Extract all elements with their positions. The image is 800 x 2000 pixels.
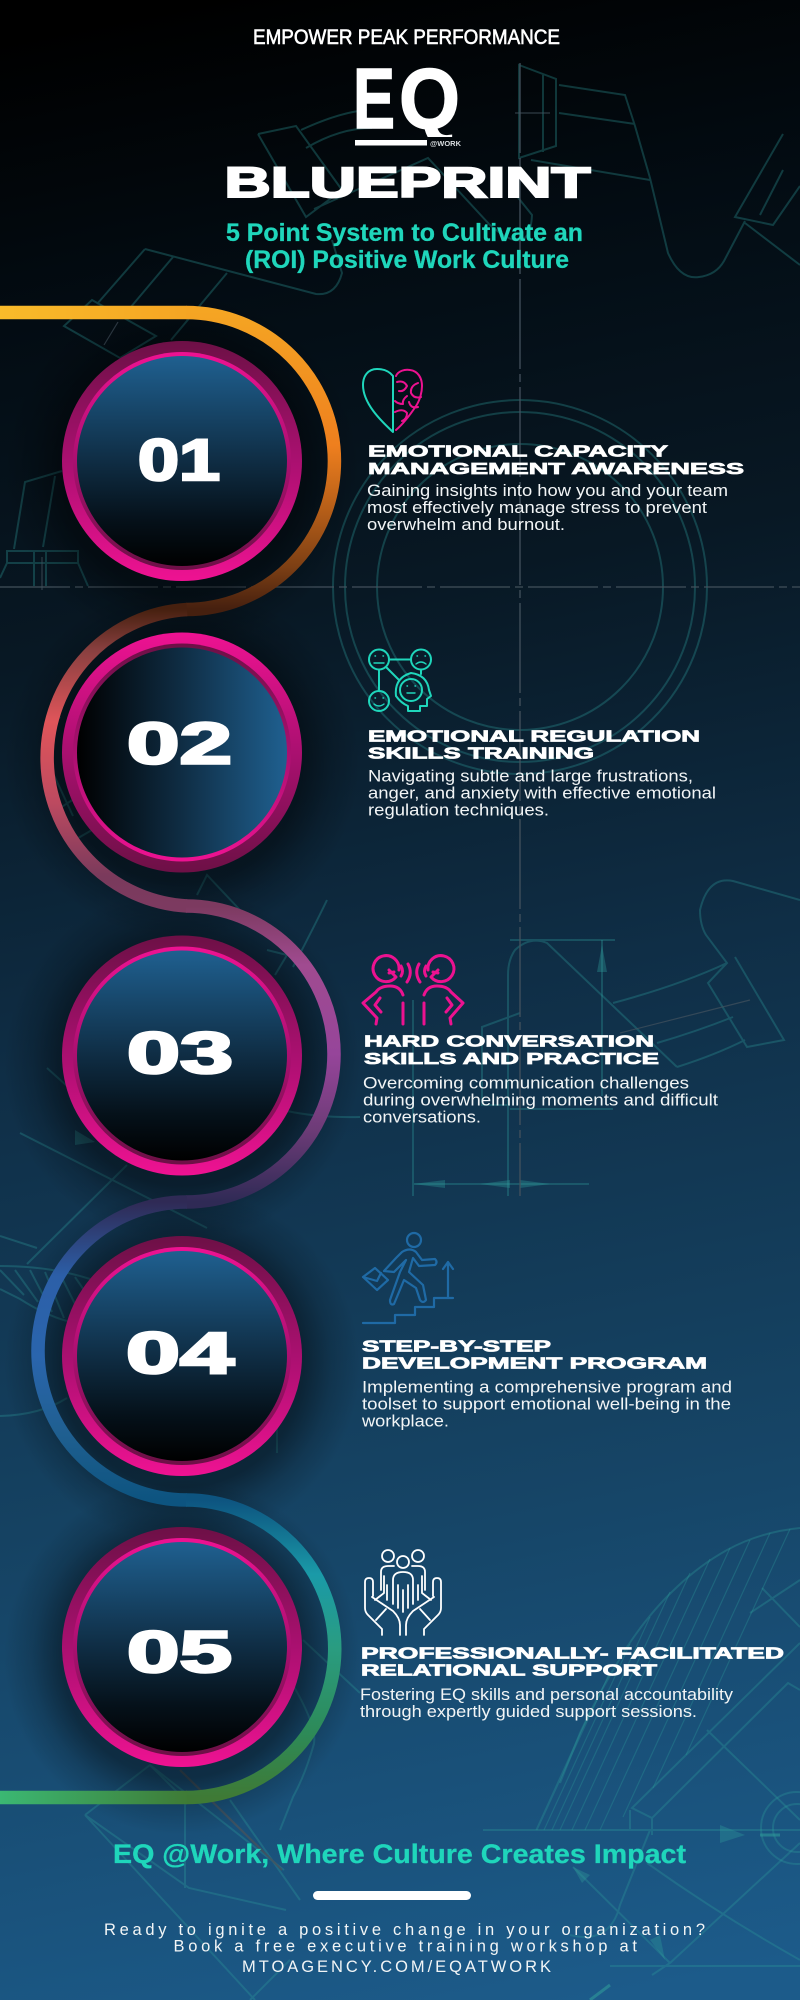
step 05 badge bbox=[62, 1527, 302, 1767]
description bbox=[360, 1685, 734, 1721]
icon: person climbing stairs bbox=[363, 1233, 453, 1323]
heading: STEP-BY-STEP bbox=[362, 1339, 552, 1356]
description: during overwhelming moments and difficult bbox=[363, 1090, 718, 1109]
description: Gaining insights into how you and your team bbox=[367, 481, 728, 500]
heading: HARD CONVERSATION bbox=[364, 1034, 654, 1051]
description: most effectively manage stress to prevent bbox=[367, 498, 707, 517]
call to action: Book a free executive training workshop at bbox=[174, 1938, 637, 1956]
logo: EQ @WORK: E bbox=[353, 52, 395, 147]
heading: PROFESSIONALLY- FACILITATED bbox=[361, 1645, 784, 1662]
description bbox=[367, 481, 728, 534]
description: Navigating subtle and large frustrations, bbox=[368, 767, 693, 786]
heading: EMOTIONAL REGULATION bbox=[368, 729, 700, 746]
heading: RELATIONAL SUPPORT bbox=[361, 1663, 657, 1680]
description: conversations. bbox=[363, 1107, 481, 1126]
description: anger, and anxiety with effective emotional bbox=[368, 784, 716, 803]
description: overwhelm and burnout. bbox=[367, 515, 565, 534]
heading bbox=[362, 1339, 707, 1373]
call to action: Ready to ignite a positive change in your organization? bbox=[104, 1921, 705, 1939]
panel: step 03 content bbox=[363, 956, 718, 1126]
heading: EMOTIONAL CAPACITY bbox=[368, 444, 669, 461]
subtitle: 5 Point System to Cultivate an bbox=[226, 219, 583, 247]
heading: DEVELOPMENT PROGRAM bbox=[362, 1356, 707, 1373]
description: Implementing a comprehensive program and bbox=[362, 1377, 732, 1396]
heading: SKILLS AND PRACTICE bbox=[364, 1051, 660, 1068]
logo: EQ @WORK: Q bbox=[399, 52, 460, 147]
header bbox=[224, 26, 590, 274]
call to action bbox=[104, 1921, 705, 1976]
footer bbox=[104, 1839, 705, 1976]
description: regulation techniques. bbox=[368, 801, 549, 820]
step 04 badge bbox=[62, 1236, 302, 1476]
icon: hands holding people bbox=[365, 1550, 441, 1635]
description bbox=[368, 767, 716, 820]
call to action: MTOAGENCY.COM/EQATWORK bbox=[242, 1958, 551, 1976]
icon: two people talking bbox=[363, 956, 463, 1024]
panel: step 04 content bbox=[361, 1233, 732, 1430]
description: through expertly guided support sessions. bbox=[360, 1702, 697, 1721]
step 03 badge bbox=[62, 936, 302, 1176]
step 02 badge bbox=[62, 632, 302, 872]
circle drop shadows bbox=[4, 293, 360, 1835]
description: toolset to support emotional well-being in the bbox=[362, 1394, 731, 1413]
winding gradient path connecting steps bbox=[0, 312, 335, 1798]
step 01 badge bbox=[62, 341, 302, 581]
subtitle: (ROI) Positive Work Culture bbox=[245, 246, 569, 274]
number 01: 01 bbox=[138, 428, 220, 493]
logo: EQ @WORK bbox=[355, 68, 461, 147]
description bbox=[361, 1377, 732, 1430]
description: workplace. bbox=[361, 1411, 449, 1430]
heading bbox=[368, 729, 700, 763]
number 04: 04 bbox=[126, 1321, 234, 1386]
panel: step 02 content bbox=[368, 650, 716, 820]
tagline: EQ @Work, Where Culture Creates Impact bbox=[113, 1839, 686, 1869]
logo: EQ @WORK: @WORK bbox=[430, 139, 462, 148]
panel: step 05 content bbox=[360, 1550, 784, 1721]
description: Overcoming communication challenges bbox=[363, 1073, 689, 1092]
description bbox=[363, 1073, 718, 1126]
eyebrow heading: EMPOWER PEAK PERFORMANCE bbox=[253, 26, 560, 49]
panel: step 01 content bbox=[363, 369, 745, 534]
heading bbox=[368, 444, 745, 478]
number 03: 03 bbox=[127, 1021, 233, 1086]
divider bar bbox=[313, 1891, 471, 1900]
description: Fostering EQ skills and personal accountability bbox=[360, 1685, 734, 1704]
heading bbox=[361, 1645, 784, 1680]
icon: heart and brain bbox=[363, 369, 422, 432]
title: BLUEPRINT bbox=[224, 159, 590, 207]
heading: SKILLS TRAINING bbox=[368, 746, 594, 763]
icon: emotion faces and head bbox=[369, 650, 431, 711]
number 02: 02 bbox=[127, 712, 232, 776]
heading: MANAGEMENT AWARENESS bbox=[368, 461, 745, 478]
number 05: 05 bbox=[127, 1620, 232, 1685]
heading bbox=[364, 1034, 660, 1068]
subtitle bbox=[226, 219, 583, 274]
